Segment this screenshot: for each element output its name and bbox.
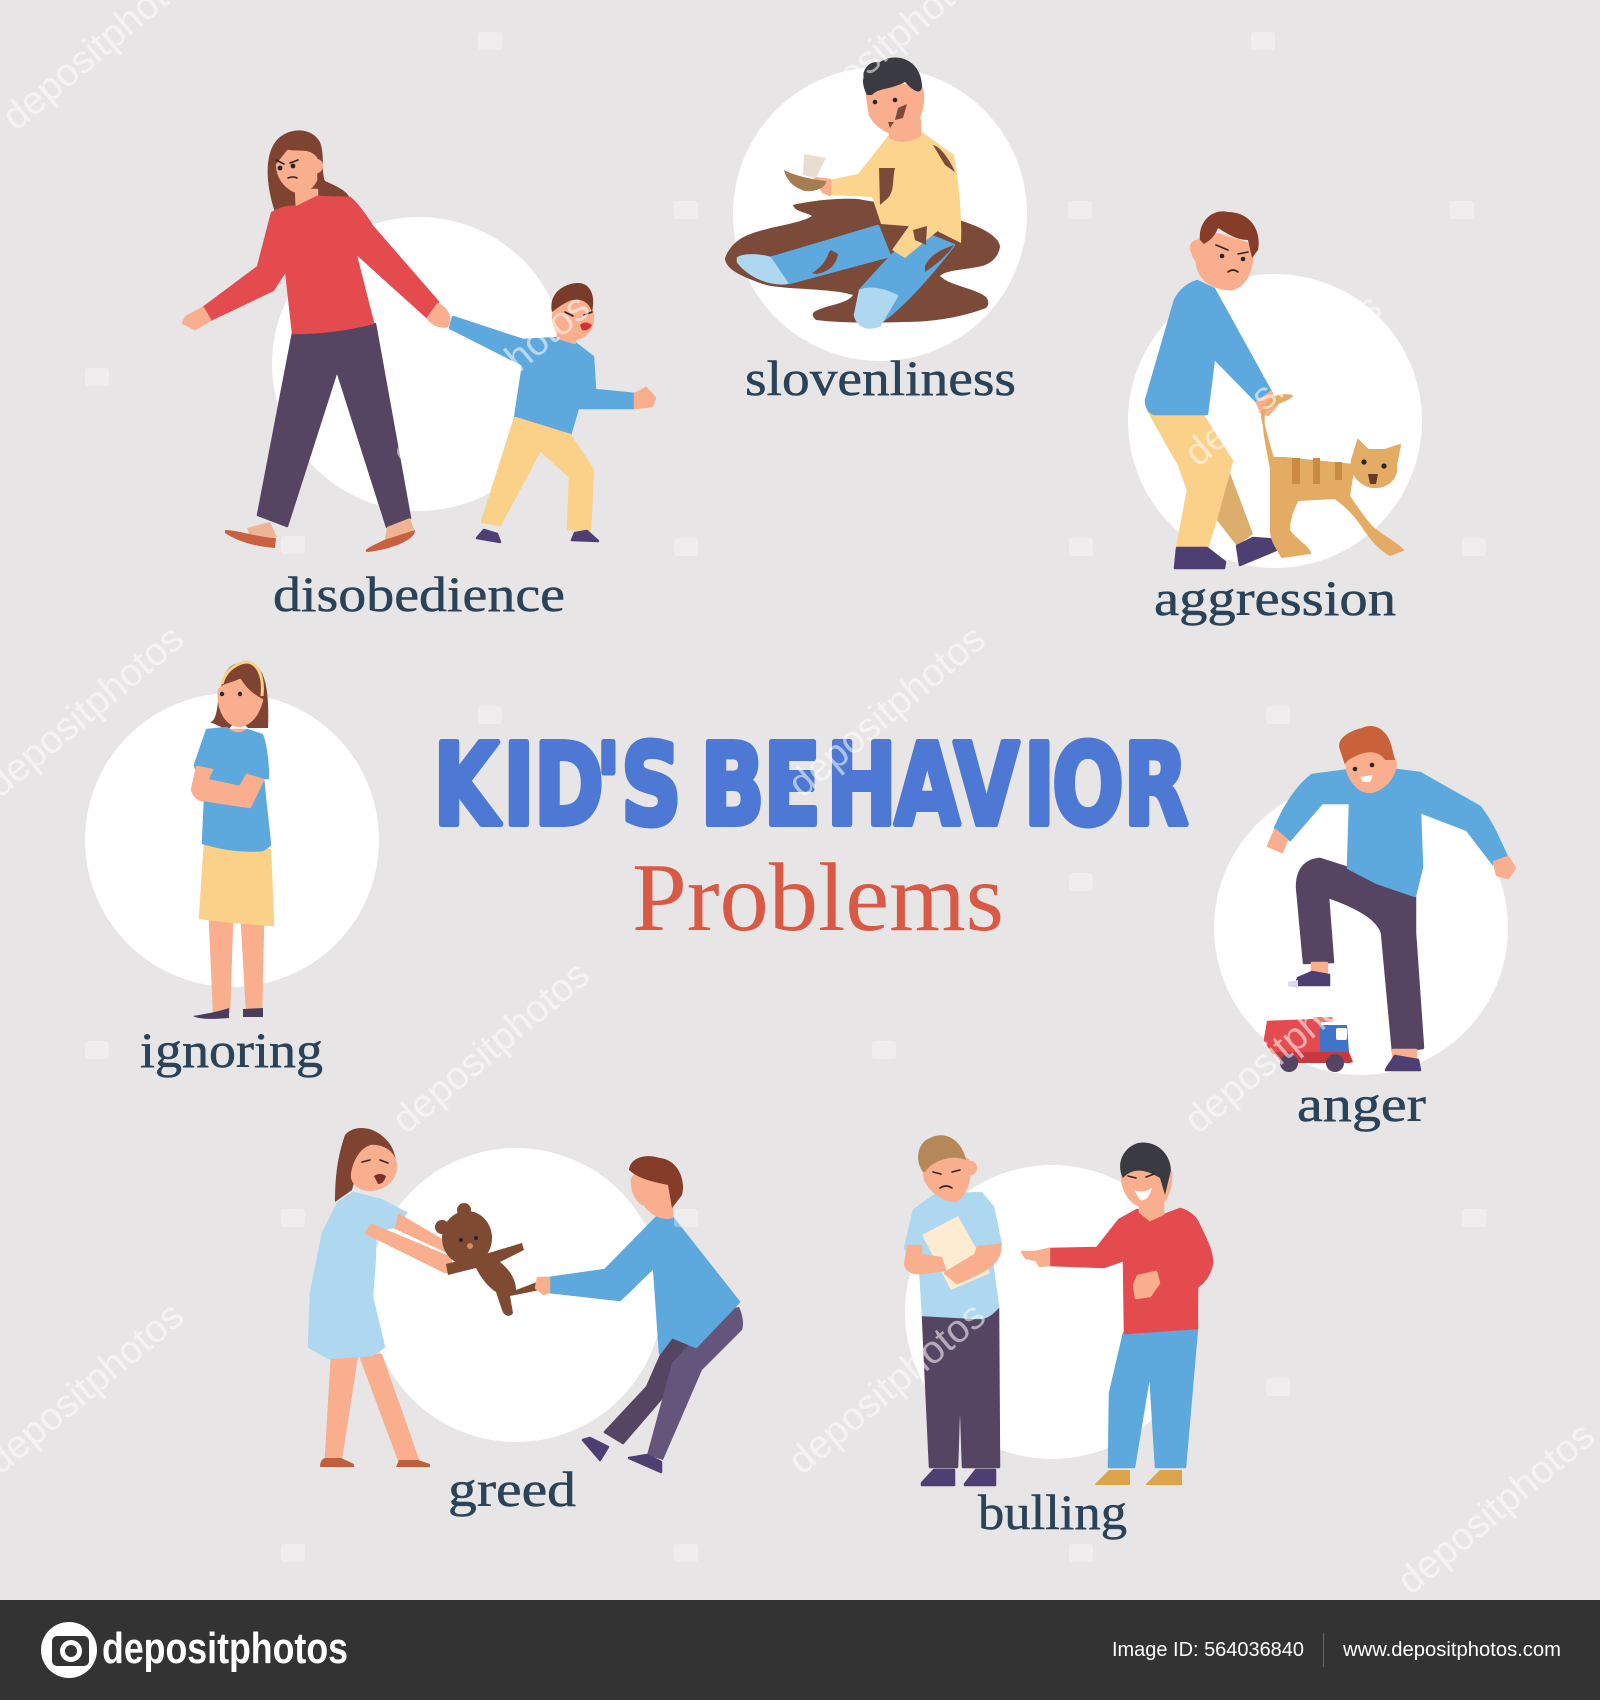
figure: girl pulling teddy	[309, 1128, 452, 1467]
figure: cat	[1262, 395, 1403, 557]
panel: slovenliness	[725, 57, 1027, 406]
label: aggression: aggression	[1154, 570, 1396, 626]
circle: ignoring backdrop	[85, 693, 379, 987]
panel: greed	[309, 1128, 743, 1517]
teddy bear	[435, 1203, 540, 1316]
label: anger: anger	[1297, 1076, 1426, 1132]
figure: boy pulling cat tail	[1146, 211, 1278, 568]
panel: ignoring	[85, 662, 379, 1078]
panel: bulling	[905, 1135, 1212, 1540]
panel: aggression	[1128, 211, 1422, 626]
watermarks: depositphotos	[384, 953, 598, 1142]
figure: crying child	[450, 283, 655, 542]
circle: aggression backdrop	[1128, 274, 1422, 568]
subtitle: Problems	[632, 844, 1004, 952]
toy boat	[784, 154, 826, 191]
label: disobedience: disobedience	[273, 566, 565, 622]
panel: disobedience	[183, 130, 655, 622]
figure: muddy boy	[738, 57, 961, 328]
circle: greed backdrop	[369, 1148, 663, 1442]
figure: sulking girl	[192, 662, 273, 1019]
watermarks: depositphotos	[780, 1294, 994, 1483]
figure: angry mother	[183, 130, 449, 552]
circle: disobedience backdrop	[272, 217, 566, 511]
puddle of mud	[725, 199, 1000, 323]
title: KID'S BEHAVIOR	[434, 721, 1188, 851]
figure: sad boy with paper	[905, 1135, 1001, 1485]
icon: camera logo	[41, 1622, 97, 1678]
figure: stomping boy	[1268, 726, 1515, 1070]
logo wordmark: depositphotos	[102, 1624, 348, 1673]
toy truck	[1265, 1017, 1353, 1072]
watermarks: depositphotos	[780, 617, 994, 806]
label: ignoring: ignoring	[140, 1022, 323, 1078]
panel: anger	[1214, 726, 1515, 1132]
circle: bulling backdrop	[905, 1165, 1199, 1459]
figure: laughing bully	[1022, 1143, 1212, 1485]
circle: slovenliness backdrop	[733, 67, 1027, 361]
watermarks: depositphotos	[1389, 1414, 1600, 1603]
watermarks: depositphotos	[1176, 953, 1390, 1142]
image id: Image ID: 564036840	[1112, 1639, 1304, 1661]
label: slovenliness: slovenliness	[745, 350, 1016, 406]
label: greed: greed	[448, 1461, 576, 1517]
site url: www.depositphotos.com	[1342, 1639, 1561, 1661]
figure: boy pulling teddy	[536, 1156, 743, 1472]
circle: anger backdrop	[1214, 781, 1508, 1075]
watermarks: depositphotos	[1176, 286, 1390, 475]
label: bulling: bulling	[978, 1484, 1127, 1540]
footer bar	[0, 1600, 1600, 1700]
watermarks: depositphotos	[384, 286, 598, 475]
